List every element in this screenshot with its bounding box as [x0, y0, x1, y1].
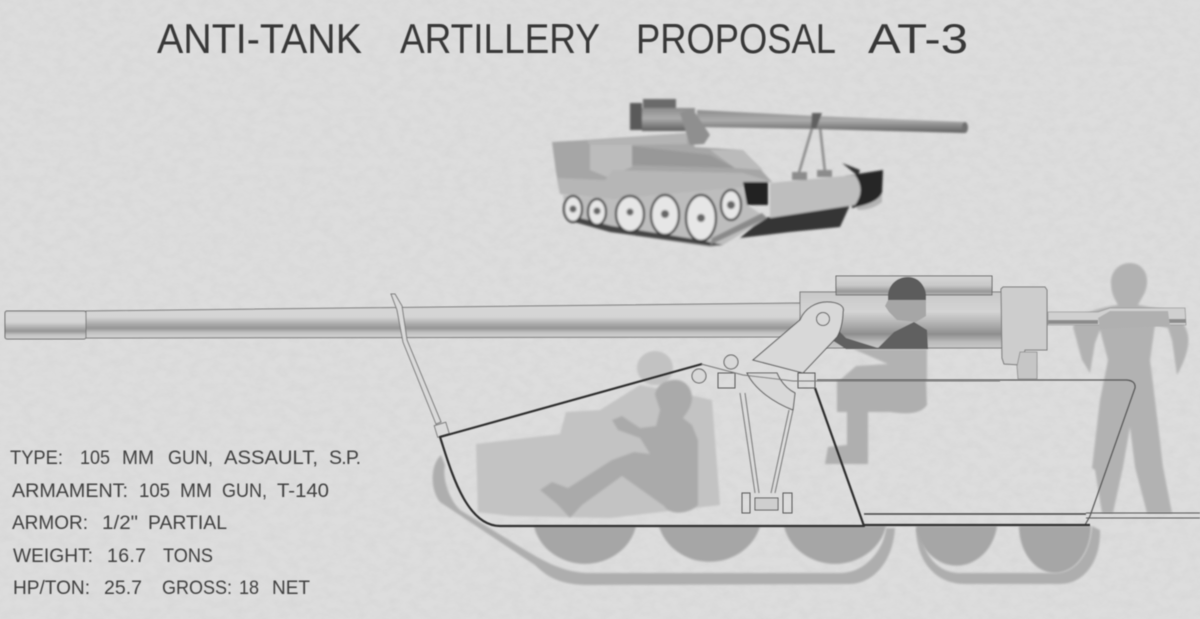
model photo: tank perspective view	[552, 99, 968, 247]
title: AT-3	[868, 15, 968, 62]
model rear hull	[770, 175, 860, 218]
spec: hp per ton: HP/TON:	[13, 577, 90, 599]
title: PROPOSAL	[636, 15, 836, 62]
spec: weight: 16.7	[107, 545, 146, 567]
gunner torso	[840, 349, 927, 380]
spec: armament: 105	[139, 480, 170, 502]
travel lock strut	[391, 294, 449, 437]
spec: hp per ton: 25.7	[104, 577, 142, 599]
model dark underside	[740, 205, 850, 238]
gun mount linkage	[692, 302, 1000, 513]
spec: type: ASSAULT,	[224, 447, 318, 469]
model wheels	[564, 190, 741, 241]
model running gear	[563, 187, 767, 247]
silhouette: gunner seated (lower body)	[825, 349, 927, 464]
spec: armor: ARMOR:	[12, 512, 88, 534]
silhouette: driver and seat	[476, 351, 720, 518]
front track run	[433, 455, 895, 585]
spec: weight	[13, 545, 213, 567]
title: ARTILLERY	[400, 15, 600, 62]
spec: type: S.P.	[329, 447, 361, 469]
spec: armament: GUN,	[222, 480, 267, 502]
spec: type: 105	[80, 447, 110, 469]
spec: type	[10, 447, 361, 469]
spec: type: TYPE:	[10, 447, 63, 469]
spec: type: MM	[122, 447, 154, 469]
title: ANTI-TANK	[157, 15, 362, 62]
spec: hp per ton	[13, 577, 310, 599]
model upper hull	[552, 133, 772, 199]
spec: armor	[12, 512, 227, 534]
spec: hp per ton: NET	[272, 577, 310, 599]
title	[157, 15, 968, 62]
hull outline	[440, 364, 1200, 526]
spec: armament	[12, 480, 329, 502]
spec: hp per ton: 18	[239, 577, 259, 599]
spec: armor: 1/2"	[102, 512, 138, 534]
spec: armament: MM	[180, 480, 212, 502]
suspension legs	[740, 393, 793, 493]
model rear drum	[845, 170, 883, 208]
spec: armor: PARTIAL	[148, 512, 227, 534]
spec: hp per ton: GROSS:	[162, 577, 232, 599]
specifications text	[10, 447, 361, 599]
main gun barrel and breech	[5, 276, 1186, 379]
rear hull	[817, 380, 1135, 525]
spec: armament: ARMAMENT:	[12, 480, 128, 502]
model gun and travel lock	[798, 125, 825, 176]
spec: weight: TONS	[163, 545, 213, 567]
road wheels	[534, 526, 1091, 573]
rear track run	[916, 526, 1100, 584]
spec: type: GUN,	[168, 447, 213, 469]
rear deck plate	[1086, 513, 1200, 518]
front hull	[440, 364, 864, 526]
gunner head and arm over gun	[832, 277, 928, 349]
tracks	[433, 455, 1100, 585]
spec: armament: T-140	[277, 480, 329, 502]
spec: weight: WEIGHT:	[13, 545, 93, 567]
silhouette: standing man behind vehicle	[1073, 263, 1188, 513]
